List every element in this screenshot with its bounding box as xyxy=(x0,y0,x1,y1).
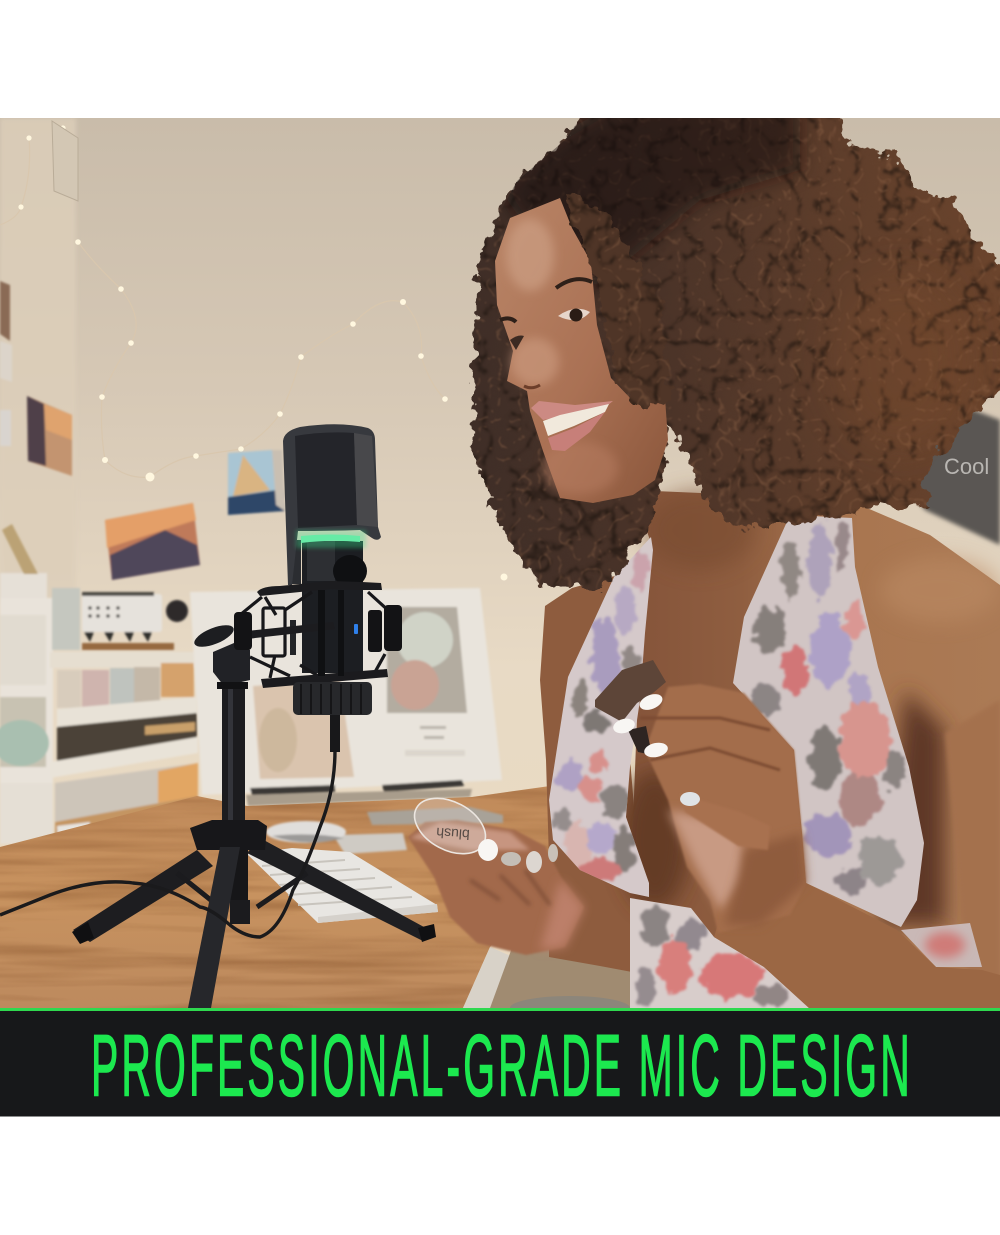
usb plug boot xyxy=(330,714,340,752)
pink heel of hand xyxy=(540,880,584,950)
darker crown of hair, kept inside the hair outline xyxy=(500,100,800,290)
compact label: blush xyxy=(436,825,470,843)
appliance on shelf xyxy=(82,594,162,632)
left leg xyxy=(73,850,213,942)
right leg xyxy=(247,838,435,941)
gain knob xyxy=(333,555,367,582)
brush head xyxy=(595,660,666,722)
front leg xyxy=(188,847,240,1008)
side shadow under arm xyxy=(880,690,945,925)
left white shelf unit xyxy=(0,524,198,846)
dress skirt lower xyxy=(625,895,815,1010)
lower hand with compact xyxy=(405,787,584,955)
palm shadow xyxy=(725,833,806,925)
lower collar xyxy=(230,900,250,924)
cleavage shadow xyxy=(620,770,690,910)
eyebrows xyxy=(500,279,592,322)
wall background xyxy=(0,118,1000,1008)
green led ring xyxy=(296,530,366,548)
photo: woman with microphone at a desk xyxy=(0,90,1000,1020)
wall plaque xyxy=(52,121,78,201)
brush handle xyxy=(628,726,652,755)
clear compact case xyxy=(405,787,495,865)
upper lip xyxy=(531,401,613,420)
stand head and lever xyxy=(194,625,250,689)
struts xyxy=(186,878,302,912)
teeth xyxy=(543,404,609,436)
pink thumb pad xyxy=(410,822,530,850)
centre tube xyxy=(222,688,245,823)
thumb xyxy=(680,794,770,850)
shock mount xyxy=(237,581,390,688)
caption title: PROFESSIONAL-GRADE MIC DESIGN xyxy=(91,1017,910,1115)
cheek and jaw xyxy=(542,442,618,494)
grey seat at floor xyxy=(510,996,630,1008)
torso skin and neck xyxy=(630,490,1000,1008)
forehead highlight xyxy=(506,219,554,291)
shock mount knobs xyxy=(234,605,402,652)
hand xyxy=(408,820,584,955)
pink palm xyxy=(668,810,745,910)
hub xyxy=(190,820,267,850)
threaded collar xyxy=(293,682,372,715)
white keyboard xyxy=(247,848,438,923)
forearm raised xyxy=(714,850,1000,1008)
tripod stand xyxy=(72,688,436,1008)
lower lip xyxy=(548,412,605,451)
usb cable xyxy=(0,750,335,937)
pale box xyxy=(52,588,80,650)
desk edge trim xyxy=(463,947,513,1008)
caption band green rule xyxy=(0,1008,1000,1011)
left shelf tower xyxy=(0,598,54,784)
hair falling over temple and cheek xyxy=(562,196,672,408)
raised hand with brush xyxy=(595,660,806,933)
right side arm xyxy=(945,700,1000,1008)
feet xyxy=(72,922,94,944)
white poster and book behind mic xyxy=(190,588,502,806)
nostril xyxy=(524,385,540,388)
palm and fingers xyxy=(645,684,806,933)
curly hair mass xyxy=(472,90,1000,590)
wooden desk xyxy=(0,786,552,1008)
nose highlight xyxy=(511,338,559,386)
far eye xyxy=(510,336,524,350)
mic body lower xyxy=(302,541,363,673)
mouse trackpad and tray xyxy=(266,807,503,854)
microphone assembly xyxy=(0,424,436,1008)
fingernails on compact xyxy=(478,839,558,873)
knuckle creases xyxy=(470,870,550,905)
tan tube xyxy=(2,524,38,574)
floor under desk xyxy=(490,950,630,1008)
dress small right section xyxy=(901,923,982,967)
finger creases xyxy=(640,718,780,770)
neckline shadow xyxy=(645,490,755,570)
pop filter xyxy=(283,424,381,585)
halter dress right xyxy=(730,510,930,930)
eye xyxy=(558,309,590,320)
warm auburn side of hair xyxy=(830,270,970,450)
string lights xyxy=(0,125,508,581)
office chair behind woman xyxy=(918,410,1000,547)
chair lettering: Cool xyxy=(944,454,989,479)
face xyxy=(495,196,672,503)
fingernails xyxy=(612,691,700,806)
left wall plane xyxy=(0,118,76,317)
wall photo cards xyxy=(0,281,285,580)
shelves xyxy=(50,652,196,668)
woman's left arm xyxy=(540,576,640,972)
caption band background xyxy=(0,1011,1000,1116)
halter dress left xyxy=(540,530,660,900)
shoulder highlight xyxy=(880,558,1000,622)
status leds xyxy=(354,624,358,634)
